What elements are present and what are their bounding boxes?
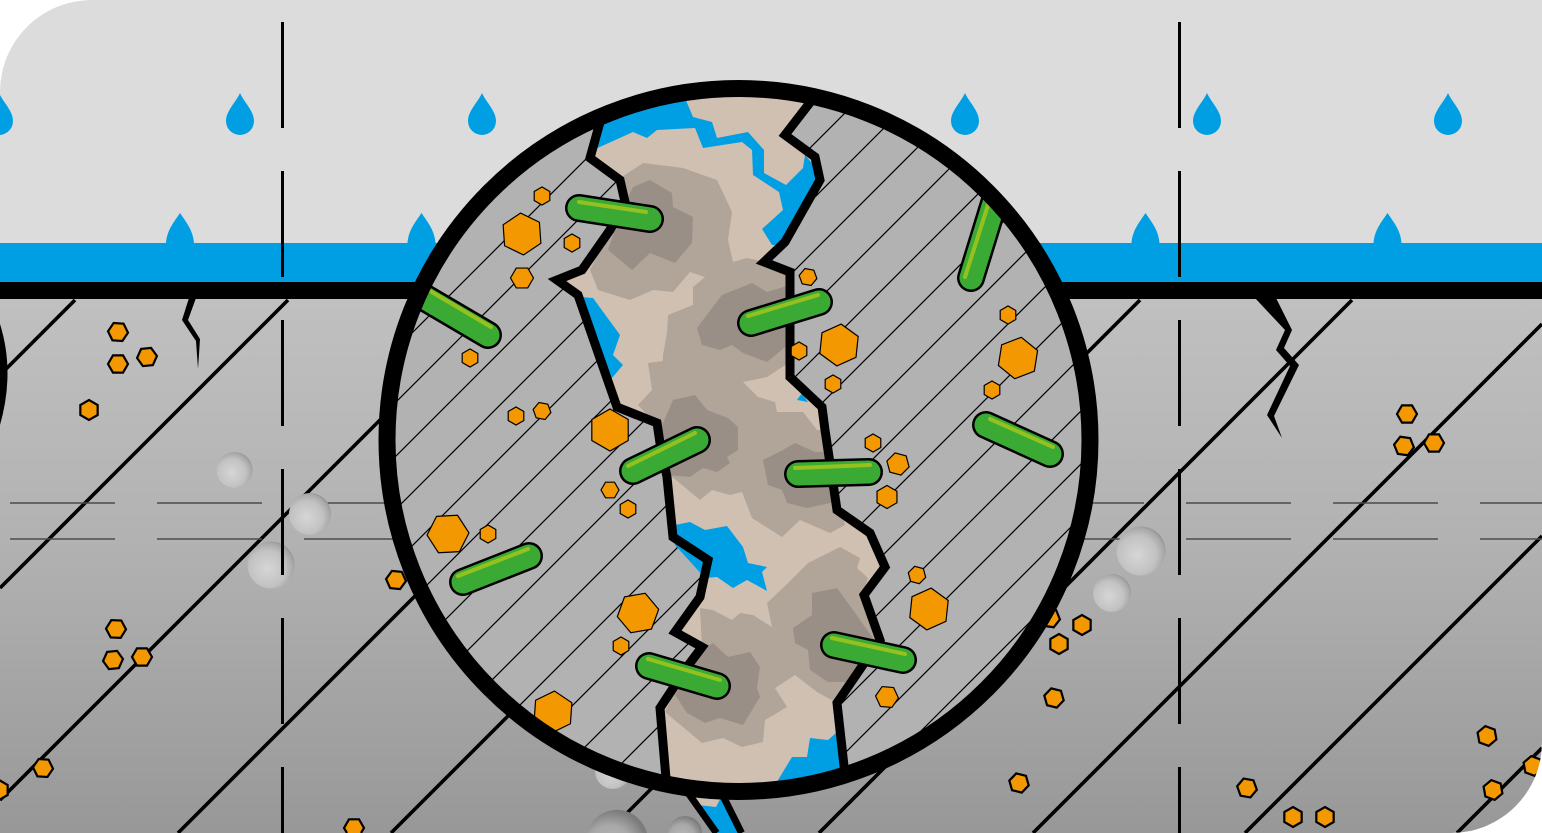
bacterium 1 [579, 202, 650, 219]
magnifying lens [380, 80, 1100, 800]
air bubbles in concrete [216, 452, 1166, 833]
crack light notch [743, 365, 820, 430]
crack outline left [557, 115, 708, 790]
vertical centre lines [282, 22, 1180, 833]
crack dark-tone healing masses [608, 180, 877, 725]
bacterium 10 [832, 638, 905, 660]
bacterium 6 [628, 433, 697, 471]
lens hatch lines [396, 114, 1081, 763]
bacterium 2 [420, 288, 491, 335]
lens calcite particles [426, 185, 1046, 739]
bacterium 7 [795, 465, 870, 474]
bacteria [420, 200, 1053, 686]
bacterium 5 [986, 419, 1053, 454]
bacterium 8 [458, 549, 529, 582]
neighbouring lens edge [0, 324, 8, 425]
calcite particles in concrete [0, 323, 1542, 833]
lens concrete fill [397, 105, 1078, 774]
lens contents [380, 80, 1100, 800]
bacterium 9 [648, 659, 720, 686]
crack fill [555, 90, 887, 800]
crack tail below lens [686, 790, 742, 833]
falling water drops [0, 93, 1462, 135]
rebar diagonal lines in concrete [0, 300, 1542, 833]
background: concrete slab [0, 298, 1542, 833]
surface water peaks [166, 213, 1402, 243]
surface crack right [1255, 298, 1299, 438]
water inside crack [580, 98, 850, 790]
crack mid-tone healing mass upper [590, 163, 845, 537]
bacterium 3 [965, 200, 995, 278]
background: sky band [0, 0, 1542, 243]
water film on surface [0, 243, 1542, 283]
crack outline right [764, 100, 885, 775]
small surface crack left [182, 298, 200, 369]
mortar joint dashes [10, 503, 1542, 539]
bacterium 4 [748, 295, 819, 323]
crack mid-tone healing mass lower [665, 547, 880, 747]
lens ring [387, 88, 1090, 792]
concrete surface line [0, 282, 1542, 299]
